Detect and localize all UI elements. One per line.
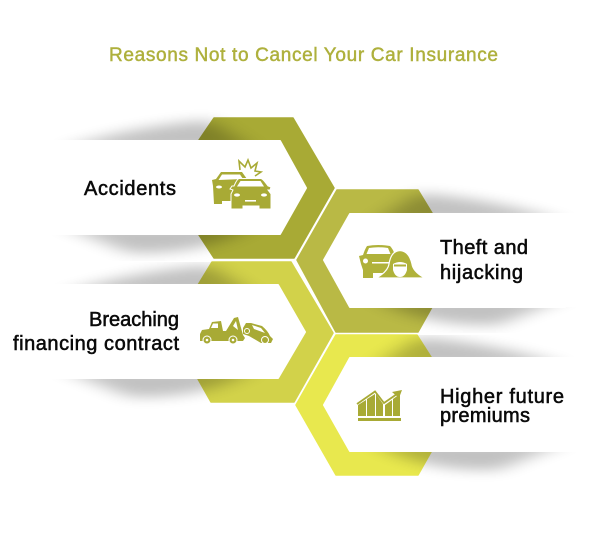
label: breaching financing contract [13,309,179,355]
panel: theft and hijacking [297,190,568,332]
label: higher future premiums [440,386,564,427]
label: breaching financing contract: Breaching [89,309,179,331]
white banner: accidents [68,141,306,234]
hexagon: accidents [199,118,334,258]
hexagon: theft [297,190,432,332]
shadow: premiums top [374,335,556,357]
icon: car thief [359,245,423,278]
shadow: theft top [377,188,556,213]
shadow: accidents top [72,116,250,140]
icon: tow truck [200,317,273,344]
panel: breaching financing contract [13,262,333,402]
label: higher future premiums: premiums [440,405,530,427]
label: breaching financing contract: financing contract [13,333,179,355]
label: theft and hijacking: hijacking [440,262,523,284]
white banner: premiums [324,358,565,451]
shadow: premiums bottom [376,452,560,476]
shadow: theft bottom [381,308,558,331]
icon: rising chart [357,390,402,421]
shadow: accidents bottom [68,235,248,259]
panel: higher future premiums [296,335,568,475]
label: higher future premiums: Higher future [440,386,564,408]
hexagon: breaching [198,262,333,402]
icon: car crash [212,160,271,209]
label: theft and hijacking: Theft and [440,237,528,259]
label: accidents: Accidents [84,178,176,200]
shadow: breaching top [74,262,252,284]
white banner: theft [324,214,565,307]
panel: accidents [60,118,334,258]
white banner: breaching [68,285,305,378]
title: Reasons Not to Cancel Your Car Insurance [109,45,498,66]
shadow: breaching bottom [68,379,250,403]
label: theft and hijacking [440,237,528,284]
hexagon: premiums [296,335,431,475]
